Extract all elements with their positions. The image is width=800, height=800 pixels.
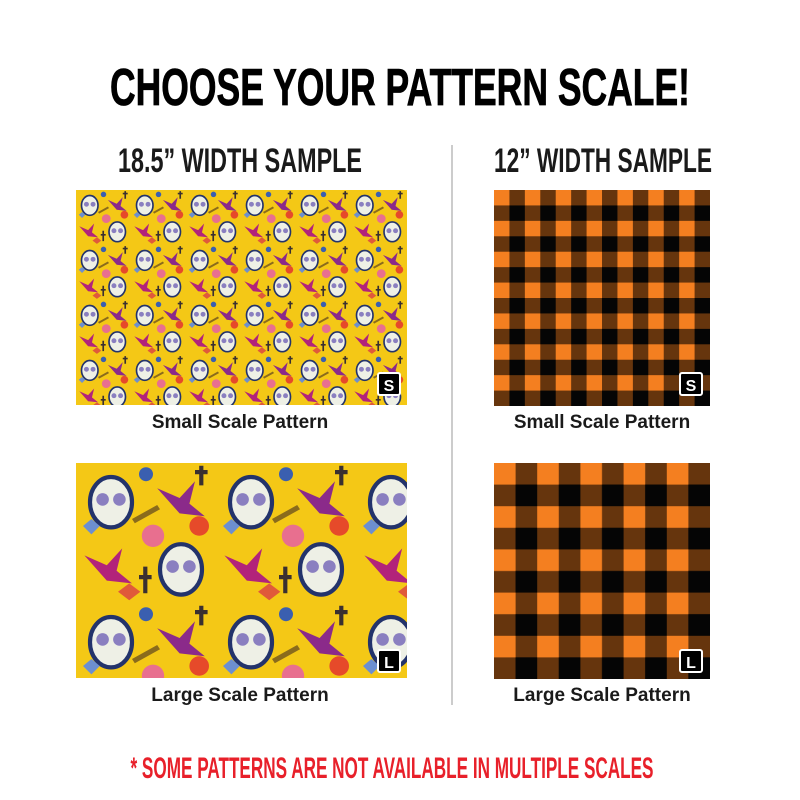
badge S [378, 373, 400, 395]
badge L: L [384, 655, 394, 672]
caption small left: Small Scale Pattern [152, 412, 328, 433]
badge L: L [686, 655, 696, 672]
caption small right: Small Scale Pattern [514, 412, 690, 433]
panel: skull small [76, 190, 407, 405]
caption large left: Large Scale Pattern [151, 685, 329, 706]
panel: skull large [76, 463, 407, 678]
heading: 18.5 width: 18.5” WIDTH SAMPLE [118, 142, 362, 180]
panel: plaid small [494, 190, 710, 406]
badge L [378, 650, 400, 672]
caption large right: Large Scale Pattern [513, 685, 691, 706]
badge L [680, 650, 702, 672]
badge S: S [686, 378, 697, 395]
panel: plaid large [494, 463, 710, 679]
badge S [680, 373, 702, 395]
badge S: S [384, 378, 395, 395]
